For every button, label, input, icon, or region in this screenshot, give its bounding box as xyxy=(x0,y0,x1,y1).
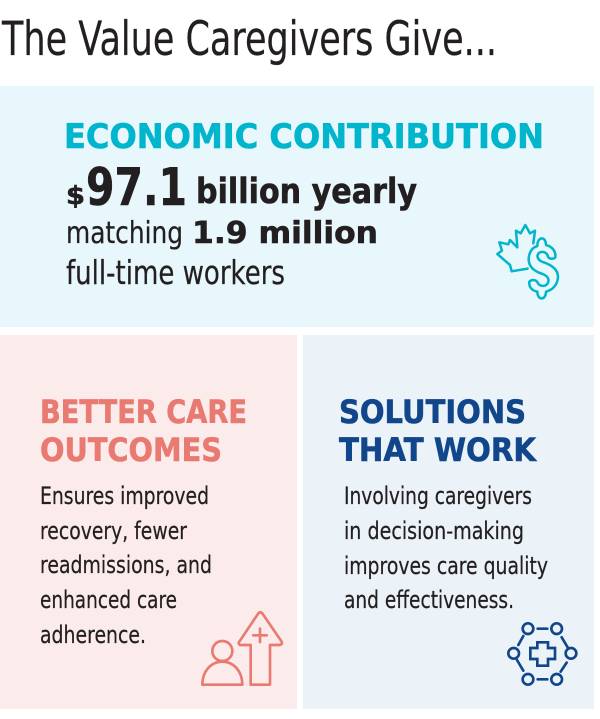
heading: solutions that work xyxy=(339,393,537,469)
heading: solutions that work: SOLUTIONS xyxy=(339,393,526,431)
heading: better care outcomes xyxy=(40,393,247,469)
text: better care body: readmissions, and xyxy=(40,551,212,579)
stat: 97.1 billion yearly xyxy=(66,158,417,218)
text: better care body xyxy=(40,482,212,649)
stat: 97.1 billion yearly: $ xyxy=(66,181,85,210)
text: matching 1.9 million: 1.9 million xyxy=(192,216,378,251)
panel: solutions that work xyxy=(303,335,594,709)
icon: maple leaf and dollar xyxy=(497,225,558,298)
panel: better care outcomes xyxy=(0,335,297,709)
heading: better care outcomes: BETTER CARE xyxy=(40,393,247,431)
text: better care body: adherence. xyxy=(40,621,146,649)
text: solutions body: in decision-making xyxy=(344,517,524,545)
text: full-time workers: full-time workers xyxy=(66,253,285,292)
heading: solutions that work: THAT WORK xyxy=(339,431,537,469)
text: solutions body: improves care quality xyxy=(344,552,548,580)
text: better care body: recovery, fewer xyxy=(40,517,187,545)
text: matching 1.9 million: matching xyxy=(66,216,183,251)
icon: care network xyxy=(508,623,576,685)
text: better care body: enhanced care xyxy=(40,586,177,614)
panel: economic contribution xyxy=(0,86,594,327)
stat: 97.1 billion yearly: 97.1 xyxy=(86,158,187,218)
text: matching 1.9 million xyxy=(66,216,378,251)
icon: person and arrow xyxy=(202,612,282,685)
heading: better care outcomes: OUTCOMES xyxy=(40,431,222,469)
text: better care body: Ensures improved xyxy=(40,482,209,510)
heading: economic contribution: ECONOMIC CONTRIBUTION xyxy=(64,117,544,157)
text: solutions body: Involving caregivers xyxy=(344,482,532,510)
text: solutions body xyxy=(344,482,548,614)
text: solutions body: and effectiveness. xyxy=(344,586,514,614)
stat: 97.1 billion yearly: billion yearly xyxy=(196,172,417,212)
